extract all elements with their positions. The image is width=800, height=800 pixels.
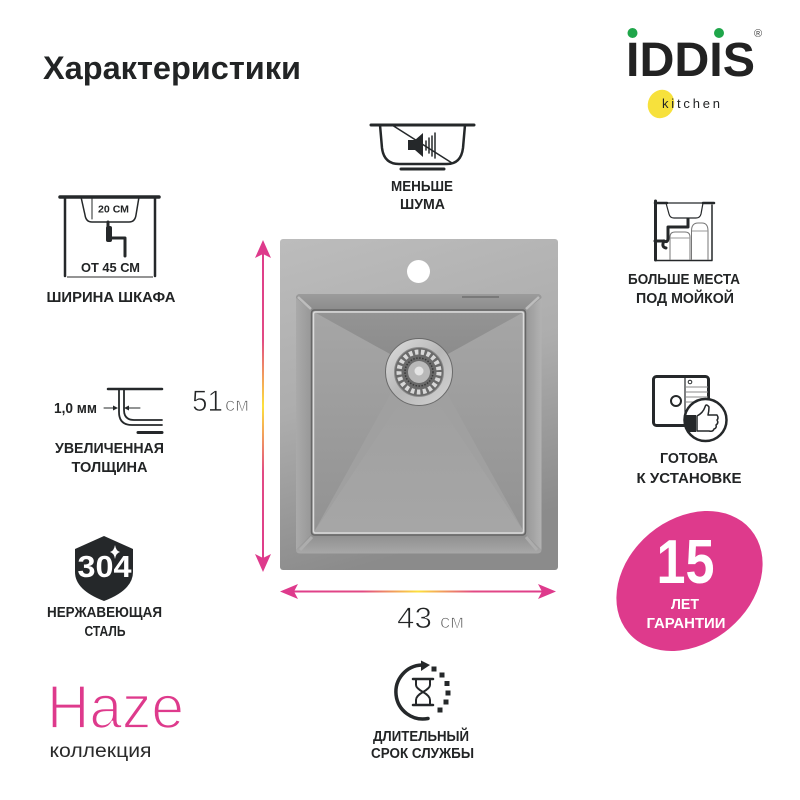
label: ready to install: ГОТОВА bbox=[660, 451, 719, 467]
panel: ready to install: К УСТАНОВКЕ bbox=[636, 471, 742, 487]
badge: 15 years warranty: 15 bbox=[656, 528, 714, 597]
dimension arrow: height 51 cm: см bbox=[225, 395, 249, 416]
logo: IDDIS kitchen: kitchen bbox=[662, 96, 720, 111]
icon: sink in cabinet: 20 СМ bbox=[98, 204, 129, 216]
panel: long service life: СРОК СЛУЖБЫ bbox=[371, 746, 474, 762]
dimension arrow: width 43 cm: см bbox=[440, 612, 464, 633]
collection name: коллекция bbox=[50, 741, 152, 762]
collection name: Haze bbox=[47, 673, 184, 741]
icon: 304 shield: 304 bbox=[78, 549, 132, 584]
dimension arrow: height 51 cm bbox=[192, 240, 271, 572]
dimension arrow: width 43 cm: 43 bbox=[397, 602, 432, 635]
basin floor bbox=[312, 311, 525, 535]
panel: less noise bbox=[371, 125, 474, 213]
panel: thickness: ТОЛЩИНА bbox=[72, 460, 148, 476]
panel: ready to install bbox=[636, 376, 742, 487]
icon: sink in cabinet: ОТ 45 СМ bbox=[81, 260, 140, 275]
panel: more space under sink bbox=[628, 201, 740, 307]
title: Характеристики bbox=[43, 50, 301, 86]
label: long service life: ДЛИТЕЛЬНЫЙ bbox=[373, 727, 469, 745]
logo: IDDIS kitchen bbox=[626, 28, 762, 123]
logo: IDDIS kitchen: IDDIS bbox=[626, 34, 755, 87]
badge: 15 years warranty bbox=[588, 482, 791, 680]
drain bbox=[386, 338, 452, 406]
icon: under-sink storage bbox=[655, 201, 714, 260]
panel: stainless steel: СТАЛЬ bbox=[84, 624, 126, 640]
label: cabinet width: ШИРИНА ШКАФА bbox=[46, 290, 176, 306]
label: more space under sink: БОЛЬШЕ МЕСТА bbox=[628, 272, 740, 288]
icon: sink with muted speaker bbox=[371, 125, 474, 169]
panel: more space under sink: ПОД МОЙКОЙ bbox=[636, 289, 734, 307]
icon: hourglass with circular arrow bbox=[396, 660, 450, 719]
dimension arrow: height 51 cm: 51 bbox=[192, 385, 223, 418]
icon: sink edge thickness: 1,0 мм bbox=[54, 401, 97, 417]
panel: stainless steel bbox=[47, 536, 162, 640]
plate bbox=[280, 239, 558, 570]
badge: 15 years warranty: ГАРАНТИИ bbox=[646, 616, 726, 632]
panel: long service life bbox=[371, 660, 474, 762]
icon: sink cutout with thumbs up bbox=[654, 376, 726, 441]
label: stainless steel: НЕРЖАВЕЮЩАЯ bbox=[47, 605, 162, 621]
logo: IDDIS kitchen: ® bbox=[754, 28, 762, 40]
basin bbox=[296, 294, 542, 554]
badge: 15 years warranty: ЛЕТ bbox=[671, 597, 699, 613]
panel: less noise: ШУМА bbox=[400, 197, 446, 213]
label: less noise: МЕНЬШЕ bbox=[391, 179, 453, 195]
dimension arrow: width 43 cm bbox=[280, 584, 556, 635]
faucet hole bbox=[407, 260, 430, 283]
panel: width of cabinet bbox=[46, 197, 176, 306]
sink top view bbox=[280, 239, 558, 570]
panel: thickness bbox=[54, 389, 164, 476]
label: increased thickness: УВЕЛИЧЕННАЯ bbox=[55, 441, 164, 457]
icon: sink in cabinet bbox=[60, 197, 159, 277]
